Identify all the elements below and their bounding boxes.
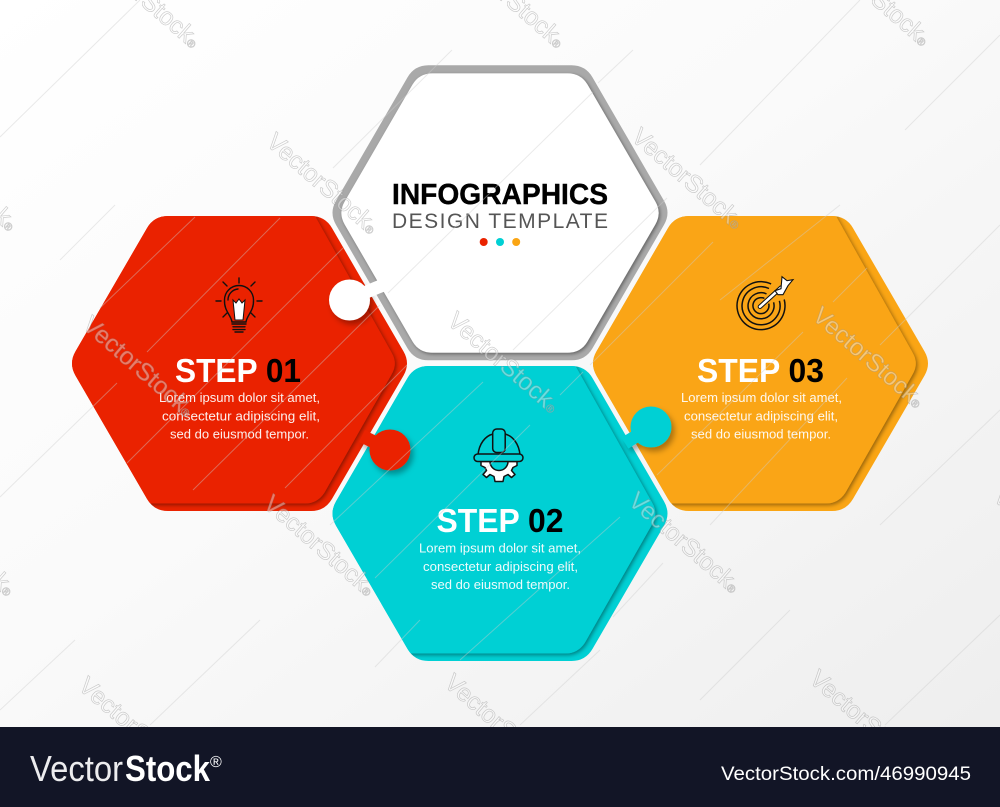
watermark text: VectorStock®: [623, 487, 746, 599]
text block: step 02 description: Lorem ipsum dolor sit amet,: [419, 542, 581, 556]
footer logo: Vector: [30, 748, 123, 789]
text block: step 02 description: consectetur adipiscing elit,: [423, 560, 578, 574]
icon: target with arrow: [737, 277, 793, 330]
icon: light bulb: [216, 278, 262, 332]
text block: step 01 description: Lorem ipsum dolor sit amet,: [159, 391, 320, 405]
watermark text: VectorStock®: [77, 311, 200, 423]
text block: step 03 description: [681, 391, 842, 442]
footer bar: [0, 727, 1000, 807]
text block: step 02 description: [419, 542, 581, 592]
title: INFOGRAPHICS: [392, 179, 608, 211]
text block: step 02 description: sed do eiusmod tempor.: [431, 578, 570, 592]
text block: step 03 description: consectetur adipiscing elit,: [684, 410, 838, 424]
watermark text: VectorStock®: [442, 307, 565, 419]
footer logo: Stock: [125, 748, 211, 789]
panel: step 03 orange hexagon: [593, 216, 928, 511]
heading: step 01: STEP 01: [175, 352, 301, 389]
text block: step 01 description: [159, 391, 320, 442]
heading: step 02: STEP 02: [436, 502, 564, 539]
watermark text: VectorStock®: [439, 669, 562, 781]
text block: step 01 description: consectetur adipiscing elit,: [162, 410, 320, 424]
text block: step 01 description: sed do eiusmod tempor.: [170, 428, 309, 442]
connector: white knob: [329, 280, 388, 320]
footer logo: [30, 748, 222, 789]
footer logo: ®: [210, 754, 222, 771]
watermark text: VectorStock®: [258, 490, 381, 602]
connector: teal knob: [625, 406, 672, 448]
watermark text: VectorStock®: [73, 672, 196, 784]
text block: step 03 description: Lorem ipsum dolor sit amet,: [681, 391, 842, 405]
panel: step 01 red hexagon: [72, 216, 416, 511]
watermark text: VectorStock®: [626, 123, 749, 235]
panel: centre title hexagon: [329, 65, 668, 360]
panel: step 02 teal hexagon: [332, 366, 678, 661]
colour dots: [480, 238, 520, 246]
watermark text: VectorStock®: [261, 128, 384, 240]
watermark text: VectorStock®: [804, 665, 927, 777]
watermark text: VectorStock®: [807, 302, 930, 414]
text block: step 03 description: sed do eiusmod tempor.: [691, 428, 831, 442]
footer image id: VectorStock.com/46990945: [721, 764, 971, 785]
subtitle: DESIGN TEMPLATE: [392, 210, 608, 233]
connector: red knob: [362, 430, 410, 470]
icon: helmet and gear: [474, 429, 523, 482]
heading: step 03: STEP 03: [697, 352, 824, 389]
